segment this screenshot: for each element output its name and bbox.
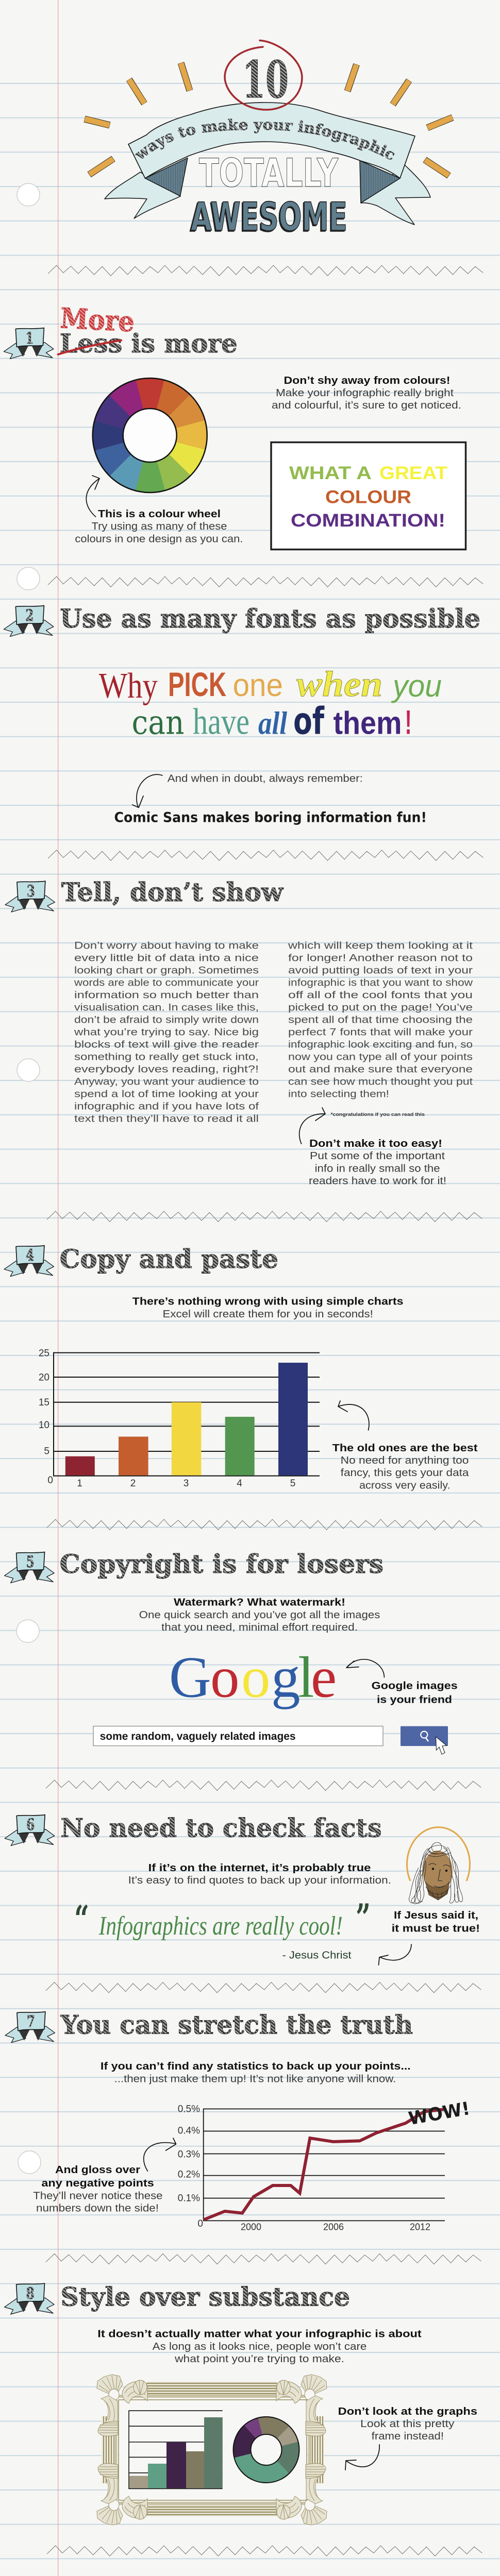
section 5: copyright [5, 1549, 458, 1754]
logo: Google: g [271, 1645, 300, 1709]
multi-font sentence: can [132, 703, 185, 742]
text column left: spend a lot of time looking at your [74, 1088, 259, 1099]
arrow to chart [338, 1401, 369, 1430]
number 10: 10 [242, 50, 289, 110]
text column left: visualisation can. In cases like this, [74, 1002, 259, 1013]
panel: colour combination: GREAT [379, 463, 447, 483]
quote text: Infographics are really cool! [98, 1911, 343, 1941]
panel: colour combination: COLOUR [325, 487, 411, 507]
text: too easy: info in really small so the [315, 1163, 440, 1174]
text: colour wheel caption [75, 509, 243, 545]
multi-font sentence: one [233, 668, 283, 703]
text: gloss over: They’ll never notice these [33, 2190, 163, 2201]
text: colour wheel caption: Try using as many of these [92, 521, 227, 532]
chart: colour wheel [90, 376, 209, 495]
wow label: WOW! [407, 2098, 472, 2129]
logo: Google: e [311, 1645, 337, 1709]
bar chart: 4 [237, 1478, 242, 1489]
heading: You can stretch the truth [60, 2010, 413, 2040]
text column right: into selecting them! [288, 1088, 389, 1099]
text: statistics: If you can’t find any statistics to back up your points... [101, 2061, 411, 2072]
text column left: don’t be afraid to simply write down [74, 1014, 259, 1025]
line chart: 0.4% [178, 2126, 200, 2137]
arrow to frame [345, 2445, 379, 2470]
text: watermark: One quick search and you’ve got all the images [139, 1609, 380, 1621]
text: if Jesus said it [392, 1910, 480, 1935]
text: internet [128, 1862, 391, 1886]
heading: Less is more: Less is more [60, 328, 238, 359]
text column left: infographic and if you have lots of [74, 1100, 259, 1112]
text: colours: Don’t shy away from colours! [284, 375, 451, 386]
text: Google images [372, 1681, 458, 1705]
text column right: infographic look exciting and fun, so [288, 1039, 473, 1050]
text: colour wheel caption: This is a colour wheel [98, 509, 221, 520]
badge 7: 7 [27, 2012, 35, 2031]
text: too easy: readers have to work for it! [309, 1176, 446, 1187]
badge 1: 1 [25, 329, 34, 348]
bar chart: 20 [39, 1372, 49, 1383]
text: graphs: frame instead! [372, 2431, 444, 2442]
bar chart: 1 [77, 1478, 82, 1489]
text column right [288, 940, 473, 1099]
section 3: tell, don't show [5, 877, 473, 1187]
text: does not matter: As long as it looks nice, people won’t care [153, 2341, 366, 2352]
text: comic sans: Comic Sans makes boring information fun! [114, 810, 427, 826]
text: too easy: Don’t make it too easy! [309, 1138, 442, 1149]
search box [93, 1726, 383, 1745]
text column right: for longer! Another reason not to [288, 952, 473, 963]
badge 5 [5, 1552, 54, 1583]
section 4: copy and paste [4, 1244, 478, 1491]
badge 8 [5, 2283, 54, 2314]
text: statistics [101, 2061, 411, 2085]
heading: Copyright is for losers [60, 1549, 384, 1579]
text: Google images: is your friend [377, 1694, 452, 1705]
text: colours: and colourful, it’s sure to get noticed. [272, 400, 461, 411]
badge 3 [5, 881, 55, 912]
text: simple charts: There’s nothing wrong with using simple charts [132, 1296, 403, 1308]
line chart: 2006 [323, 2222, 344, 2232]
text: gloss over [33, 2164, 163, 2214]
panel: colour combination [271, 442, 466, 549]
line chart [178, 2104, 445, 2232]
text column left: Don’t worry about having to make [74, 940, 259, 951]
text: does not matter [97, 2328, 422, 2365]
multi-font sentence: you [391, 669, 442, 703]
heading: Copy and paste [60, 1244, 278, 1274]
section 7: stretch the truth [5, 2010, 472, 2232]
section 6: no need to check facts [5, 1812, 480, 1965]
tiny print: *congratulations if you can read this [331, 1112, 425, 1117]
text column right: infographic is that you want to show [288, 977, 473, 988]
text: colours: Make your infographic really bright [276, 387, 454, 399]
multi-font sentence: when [296, 665, 382, 704]
bar chart: 10 [39, 1420, 49, 1431]
section 8: style over substance [5, 2282, 477, 2525]
multi-font sentence: all [258, 706, 288, 741]
text: graphs [338, 2406, 477, 2442]
badge 2 [4, 605, 54, 636]
text: does not matter: what point you’re trying to make. [174, 2353, 344, 2365]
badge 1 [4, 328, 54, 359]
text column right: off all of the cool fonts that you [288, 989, 473, 1001]
text column left [74, 940, 259, 1124]
line chart: 2000 [241, 2222, 261, 2232]
text column right: spent all of that time choosing the [288, 1014, 473, 1025]
section 2: fonts [4, 603, 480, 826]
text: colour wheel caption: colours in one design as you can. [75, 534, 243, 545]
bar chart: 3 [184, 1478, 189, 1489]
red circle around 10 [225, 40, 302, 110]
text: old ones: The old ones are the best [332, 1443, 478, 1454]
multi-font sentence: of [293, 699, 324, 742]
bar chart: 15 [39, 1397, 49, 1408]
multi-font sentence: have [193, 701, 249, 742]
bar chart in frame [129, 2410, 223, 2489]
multi-font sentence: Why [99, 666, 158, 706]
text column left: looking chart or graph. Sometimes [74, 964, 259, 976]
ribbon banner [128, 103, 415, 178]
text column right: perfect 7 fonts that will make your [288, 1026, 473, 1038]
text: simple charts: Excel will create them for you in seconds! [163, 1309, 373, 1320]
badge 8: 8 [26, 2284, 35, 2303]
badge 6 [5, 1815, 55, 1845]
text column left: Anyway, you want your audience to [74, 1076, 259, 1087]
ribbon tails [105, 158, 430, 225]
badge 5: 5 [26, 1553, 35, 1571]
text: does not matter: It doesn’t actually matter what your infographic is about [97, 2328, 422, 2340]
multi-font sentence: them [333, 705, 402, 741]
bar chart [39, 1348, 320, 1489]
text column right: can see how much thought you put [288, 1076, 473, 1087]
logo: Google: o [241, 1645, 270, 1709]
text column left: everybody loves reading, right?! [74, 1063, 259, 1075]
line chart: 0 [197, 2218, 203, 2229]
text column left: blocks of text will give the reader [74, 1039, 259, 1050]
line chart: 0.3% [178, 2149, 200, 2160]
arrow to axis [144, 2138, 176, 2171]
heading correction: More: More [59, 301, 135, 338]
title graphic [84, 39, 454, 240]
section 1: more is more [4, 301, 465, 549]
multi-font sentence: PICK [168, 665, 226, 703]
badge 3: 3 [27, 882, 35, 901]
search box: some random, vaguely related images [100, 1731, 296, 1742]
bar chart: 2 [130, 1478, 136, 1489]
badge 2: 2 [25, 606, 34, 625]
heading: No need to check facts [61, 1812, 381, 1843]
text: Google images: Google images [372, 1681, 458, 1692]
heading: Tell, don’t show [61, 877, 284, 907]
text: gloss over: any negative points [41, 2178, 154, 2189]
quote attribution: - Jesus Christ [282, 1950, 352, 1961]
text: simple charts [132, 1296, 403, 1320]
hole punches [16, 183, 41, 2576]
line chart: 0.2% [178, 2170, 200, 2180]
heading: Style over substance [61, 2282, 350, 2312]
icon: pencil starburst [85, 63, 453, 176]
quote marks: “ [74, 1897, 89, 1941]
logo: Google: G [169, 1645, 211, 1709]
text column right: picked to put on the page! You’ve [288, 1002, 473, 1013]
arrow to tiny print [299, 1108, 325, 1144]
text: internet: If it’s on the internet, it’s probably true [148, 1862, 371, 1874]
quote marks: ” [356, 1895, 371, 1939]
bar chart: 5 [290, 1478, 295, 1489]
heading: Use as many fonts as possible [60, 603, 480, 634]
arrow down [132, 774, 162, 808]
badge 6: 6 [26, 1816, 35, 1834]
bar chart: 5 [44, 1446, 49, 1457]
line chart: 2012 [410, 2222, 430, 2232]
text column left: something to really get stuck into, [74, 1051, 259, 1062]
text column right: avoid putting loads of text in your [288, 964, 473, 976]
text column right: now you can type all of your points [288, 1051, 473, 1062]
icon: Jesus portrait [407, 1827, 470, 1904]
badge 4 [4, 1246, 54, 1277]
awesome: AWESOME [191, 194, 347, 240]
bar chart: 0 [47, 1475, 53, 1486]
text: old ones: across very easily. [359, 1480, 451, 1491]
text: gloss over: numbers down the side! [36, 2203, 159, 2214]
badge 4: 4 [26, 1246, 34, 1265]
line chart: 0.1% [178, 2193, 200, 2204]
text: old ones [332, 1443, 478, 1491]
text: internet: It’s easy to find quotes to back up your information. [128, 1875, 391, 1886]
text: watermark: Watermark? What watermark! [174, 1597, 345, 1608]
text: when in doubt: And when in doubt, always remember: [168, 773, 363, 784]
quote marks [74, 1895, 371, 1941]
arrow to logo [346, 1659, 384, 1677]
text: watermark: that you need, minimal effort required. [161, 1622, 358, 1633]
search button [401, 1726, 448, 1754]
text column right: out and make sure that everyone [288, 1063, 473, 1075]
totally: TOTALLY [199, 150, 339, 196]
text: old ones: No need for anything too [341, 1455, 469, 1466]
line chart: 0.5% [178, 2104, 200, 2115]
ribbon text: ways to make your infographic [135, 118, 395, 160]
text column right: which will keep them looking at it [288, 940, 473, 951]
strike-through [58, 340, 121, 354]
bar chart: 25 [39, 1348, 49, 1359]
arrow to quote [378, 1944, 411, 1965]
text: old ones: fancy, this gets your data [341, 1467, 469, 1479]
text: too easy: Put some of the important [310, 1150, 445, 1162]
text: statistics: ...then just make them up! It’s not like anyone will know. [114, 2074, 396, 2085]
text: too easy [309, 1138, 446, 1187]
text: watermark [139, 1597, 380, 1633]
text: if Jesus said it: If Jesus said it, [394, 1910, 478, 1921]
text: colours [272, 375, 461, 411]
ornate picture frame [97, 2375, 327, 2525]
text column left: every little bit of data into a nice [74, 952, 259, 963]
text: if Jesus said it: it must be true! [392, 1923, 480, 1935]
multi-font sentence [99, 665, 442, 742]
text column left: what you’re trying to say. Nice big [74, 1026, 259, 1038]
donut chart in frame [232, 2416, 301, 2484]
badge 7 [5, 2012, 55, 2043]
logo: Google: l [298, 1645, 314, 1709]
panel: colour combination: COMBINATION! [291, 511, 445, 531]
text column left: text then they’ll have to read it all [74, 1113, 259, 1124]
text: gloss over: And gloss over [55, 2164, 140, 2176]
multi-font sentence: ! [405, 703, 412, 741]
text: graphs: Don’t look at the graphs [338, 2406, 477, 2417]
text column left: information so much better than [74, 989, 259, 1001]
logo: Google: o [210, 1645, 239, 1709]
text column left: words are able to communicate your [74, 977, 259, 988]
text: graphs: Look at this pretty [360, 2418, 455, 2430]
panel: colour combination: WHAT A [289, 463, 372, 483]
arrow to wheel [86, 476, 99, 517]
